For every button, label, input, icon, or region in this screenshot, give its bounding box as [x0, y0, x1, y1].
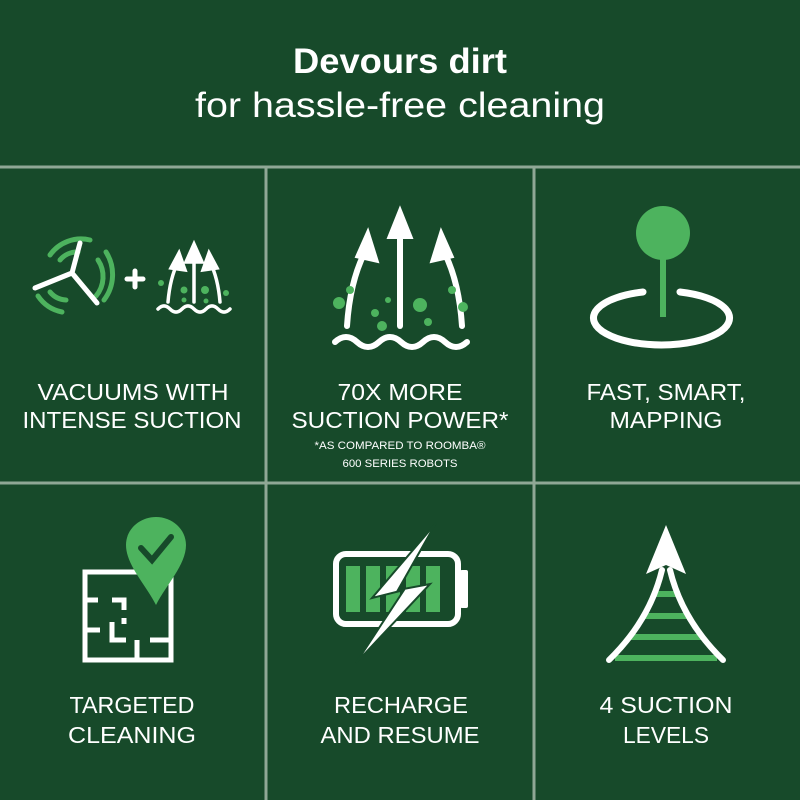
icon: plus — [127, 271, 143, 287]
panel: suction levels: LEVELS — [623, 722, 709, 748]
panel: targeted cleaning: CLEANING — [68, 722, 196, 748]
label: FAST, SMART, — [586, 379, 746, 405]
panel: mapping — [586, 206, 746, 433]
label: 70X MORE — [338, 379, 462, 405]
panel: suction power: 600 SERIES ROBOTS — [342, 458, 458, 470]
icon: big suction arrows — [335, 208, 467, 347]
panel: targeted cleaning — [68, 517, 196, 748]
label: TARGETED — [70, 692, 194, 718]
label: 4 SUCTION — [600, 692, 732, 718]
panel: mapping: MAPPING — [610, 407, 722, 433]
title: for hassle-free cleaning — [195, 86, 605, 125]
footnote: *AS COMPARED TO ROOMBA® — [314, 440, 486, 452]
panel: recharge: AND RESUME — [320, 722, 480, 748]
panel: suction levels — [600, 525, 732, 748]
title: Devours dirt — [293, 42, 507, 81]
icon: suction level tree — [609, 525, 723, 661]
icon: fan — [35, 239, 113, 312]
icon: floor plan with pin — [85, 517, 186, 660]
icon: small suction arrows — [158, 244, 230, 312]
label: RECHARGE — [334, 692, 468, 718]
icon: battery with bolt — [336, 523, 468, 663]
panel: recharge — [320, 523, 480, 748]
title — [195, 42, 605, 125]
panel: intense suction: INTENSE SUCTION — [22, 407, 241, 433]
icon: map pin — [594, 206, 730, 345]
panel: intense suction — [22, 239, 241, 433]
panel: suction power: SUCTION POWER* — [292, 407, 509, 433]
panel: suction power — [292, 208, 509, 470]
label: VACUUMS WITH — [38, 379, 228, 405]
